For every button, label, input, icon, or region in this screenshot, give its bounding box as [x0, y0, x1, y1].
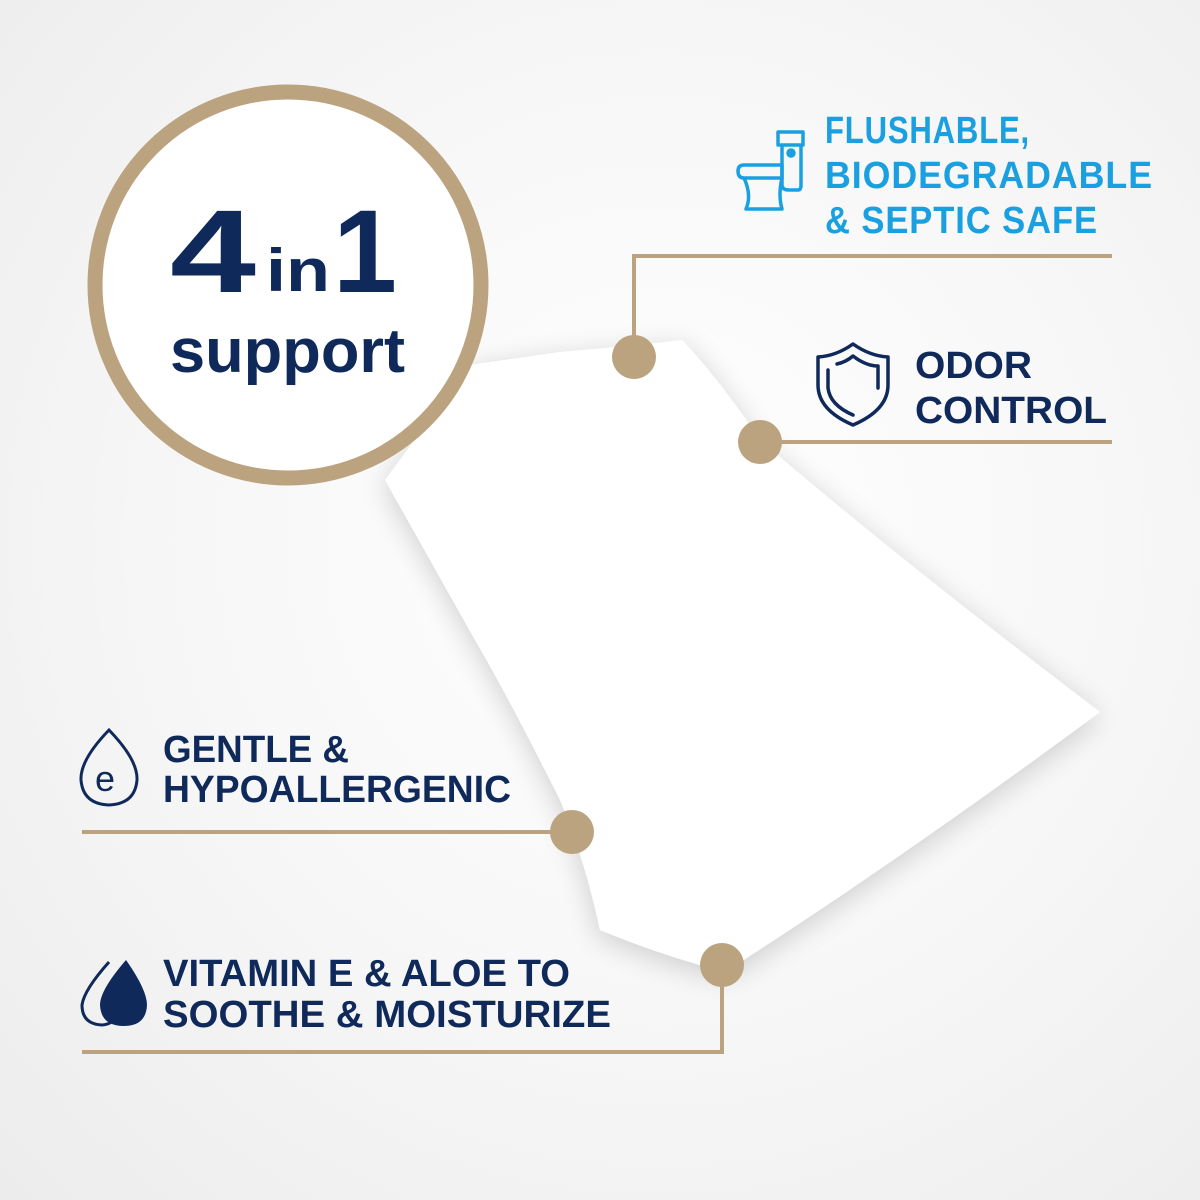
badge: 4 in 1 support: 4 [170, 186, 256, 318]
icon: drop with e [81, 730, 137, 805]
callout: gentle: GENTLE & [163, 729, 349, 771]
callout: gentle [81, 729, 594, 854]
callout: vitamin e: VITAMIN E & ALOE TO [163, 953, 570, 995]
callout: odor control [738, 344, 1112, 464]
icon: drop with e: e [95, 758, 115, 799]
callout: vitamin e [82, 943, 744, 1052]
callout: flushable: BIODEGRADABLE [825, 155, 1153, 197]
callout: flushable: FLUSHABLE, [825, 110, 1030, 152]
badge: 4 in 1 support: in [266, 237, 330, 304]
badge: 4 in 1 support [95, 92, 481, 478]
icon: two drops [82, 960, 147, 1026]
callout: gentle: HYPOALLERGENIC [163, 769, 511, 811]
badge: 4 in 1 support: 1 [333, 186, 397, 318]
callout: odor control: ODOR [915, 345, 1032, 387]
callout: flushable: & SEPTIC SAFE [825, 200, 1098, 242]
icon: shield [818, 344, 888, 425]
callout: flushable [612, 110, 1165, 379]
callout: odor control: CONTROL [915, 390, 1107, 432]
callout: vitamin e: SOOTHE & MOISTURIZE [163, 994, 611, 1036]
icon: toilet [738, 132, 803, 209]
badge: 4 in 1 support: support [170, 317, 405, 386]
wipe shape [385, 340, 1100, 972]
